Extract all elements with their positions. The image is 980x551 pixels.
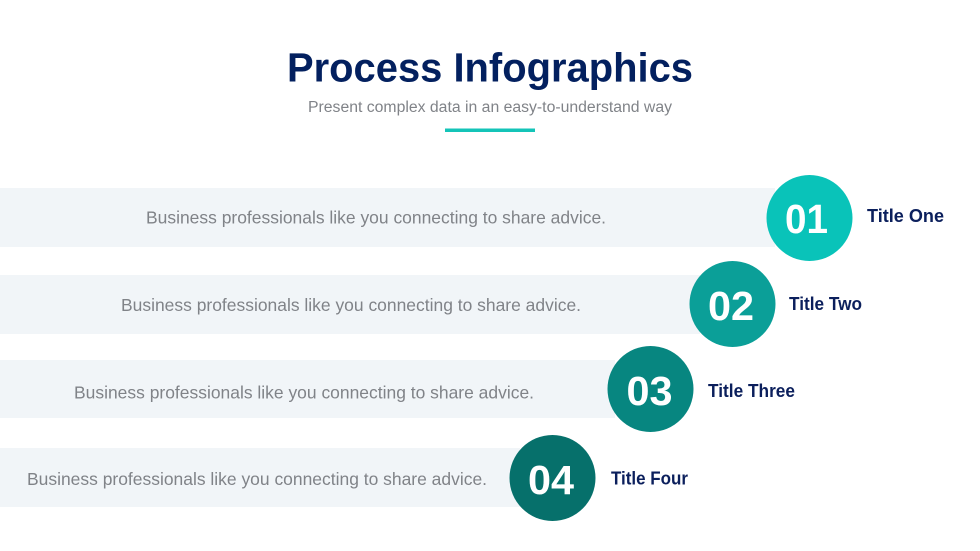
step 3	[0, 346, 795, 432]
step 4	[0, 435, 688, 521]
step 4 number circle	[510, 435, 596, 521]
step 1 bar	[0, 188, 775, 247]
step 1 number: 01	[785, 196, 828, 242]
step 3 number: 03	[626, 368, 672, 414]
step 1 description: Business professionals like you connecting to share advice.	[146, 208, 606, 228]
step 3 title: Title Three	[708, 381, 795, 401]
step 2 description: Business professionals like you connecting to share advice.	[121, 295, 581, 315]
step 4 title: Title Four	[611, 468, 688, 488]
step 4 description: Business professionals like you connecting to share advice.	[27, 469, 487, 489]
step 3 number circle	[608, 346, 694, 432]
subtitle: Present complex data in an easy-to-understand way	[308, 99, 672, 116]
step 2 title: Title Two	[789, 294, 862, 314]
step 2 bar	[0, 275, 700, 334]
step 2 number circle	[690, 261, 776, 347]
step 1 number circle	[766, 175, 852, 261]
step 1	[0, 175, 944, 261]
title underline	[445, 128, 535, 132]
step 1 title: Title One	[867, 206, 944, 226]
step 4 number: 04	[528, 457, 574, 503]
step 3 bar	[0, 360, 615, 418]
title: Process Infographics	[287, 44, 693, 90]
step 2 number: 02	[708, 283, 754, 329]
step 3 description: Business professionals like you connecting to share advice.	[74, 382, 534, 402]
step 2	[0, 261, 862, 347]
step 4 bar	[0, 448, 520, 507]
